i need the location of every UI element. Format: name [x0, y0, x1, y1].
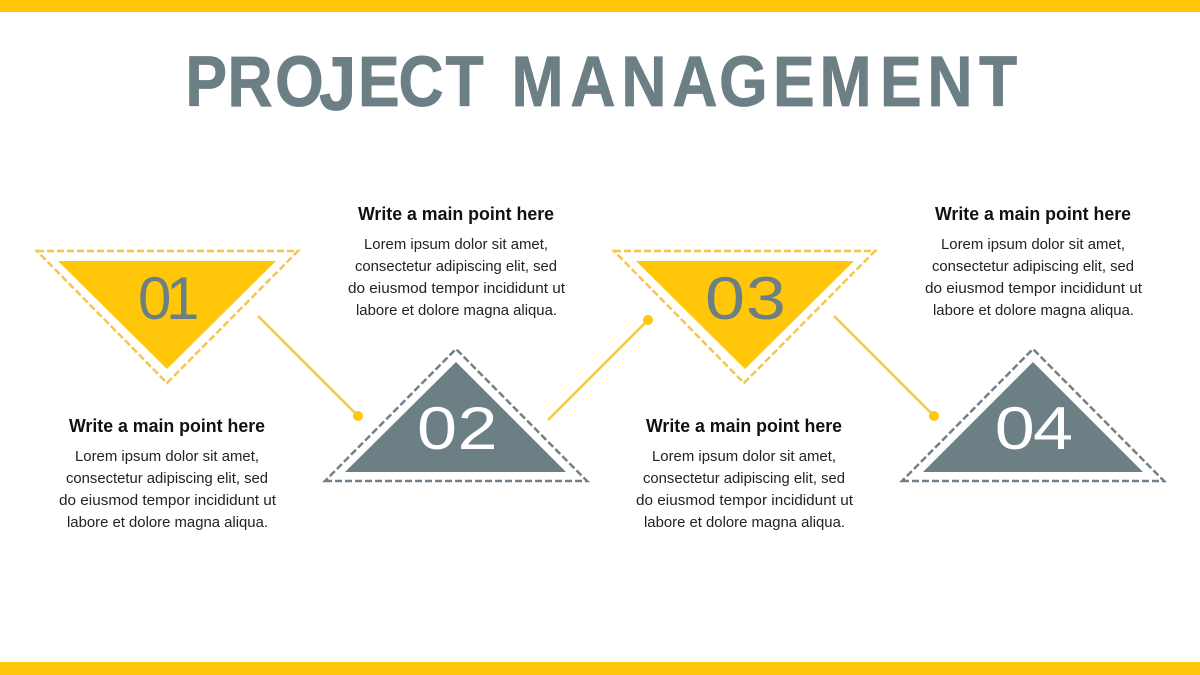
panel: step 01: [37, 251, 298, 531]
body text 03: Lorem ipsum dolor sit amet,: [652, 449, 836, 465]
icon: dashed triangle 02: [325, 349, 587, 481]
icon: gray triangle 04: [923, 362, 1143, 472]
bottom bar: [0, 662, 1200, 675]
body text 01: do eiusmod tempor incididunt ut: [59, 493, 276, 509]
number 03: 03: [705, 266, 786, 333]
body text 04: do eiusmod tempor incididunt ut: [925, 281, 1142, 297]
body text 02: [348, 237, 565, 319]
body text 04: labore et dolore magna aliqua.: [933, 303, 1134, 319]
body text 02: Lorem ipsum dolor sit amet,: [364, 237, 548, 253]
text block 02: [348, 204, 565, 319]
arrow: connector 03 to 04: [834, 316, 939, 421]
arrow: connector 02 to 03: [548, 315, 653, 420]
heading 02: Write a main point here: [358, 204, 554, 224]
body text 04: [925, 237, 1142, 319]
body text 01: labore et dolore magna aliqua.: [67, 515, 268, 531]
icon: yellow triangle 03: [636, 261, 854, 369]
body text 02: labore et dolore magna aliqua.: [356, 303, 557, 319]
heading 03: Write a main point here: [646, 416, 842, 436]
icon: dashed triangle 04: [902, 349, 1164, 481]
heading 01: Write a main point here: [69, 416, 265, 436]
number 02: 02: [417, 396, 498, 463]
body text 01: [59, 449, 276, 531]
icon: dashed triangle 01: [37, 251, 298, 383]
body text 03: do eiusmod tempor incididunt ut: [636, 493, 853, 509]
panel: step 03: [614, 251, 875, 531]
arrow: connector 01 to 02: [258, 316, 363, 421]
text block 04: [925, 204, 1142, 319]
panel: step 02: [325, 204, 587, 481]
title: PROJECT MANAGEMENT: [185, 42, 1017, 127]
top bar: [0, 0, 1200, 12]
heading 04: Write a main point here: [935, 204, 1131, 224]
body text 02: consectetur adipiscing elit, sed: [355, 259, 557, 275]
number 04: 04: [995, 396, 1073, 463]
body text 04: Lorem ipsum dolor sit amet,: [941, 237, 1125, 253]
body text 02: do eiusmod tempor incididunt ut: [348, 281, 565, 297]
body text 03: [636, 449, 853, 531]
body text 03: consectetur adipiscing elit, sed: [643, 471, 845, 487]
icon: dashed triangle 03: [614, 251, 875, 383]
text block 03: [636, 416, 853, 531]
body text 01: consectetur adipiscing elit, sed: [66, 471, 268, 487]
panel: step 04: [902, 204, 1164, 481]
body text 01: Lorem ipsum dolor sit amet,: [75, 449, 259, 465]
text block 01: [59, 416, 276, 531]
body text 04: consectetur adipiscing elit, sed: [932, 259, 1134, 275]
icon: gray triangle 02: [345, 362, 566, 472]
icon: yellow triangle 01: [58, 261, 276, 369]
number 01: 01: [138, 265, 199, 332]
body text 03: labore et dolore magna aliqua.: [644, 515, 845, 531]
